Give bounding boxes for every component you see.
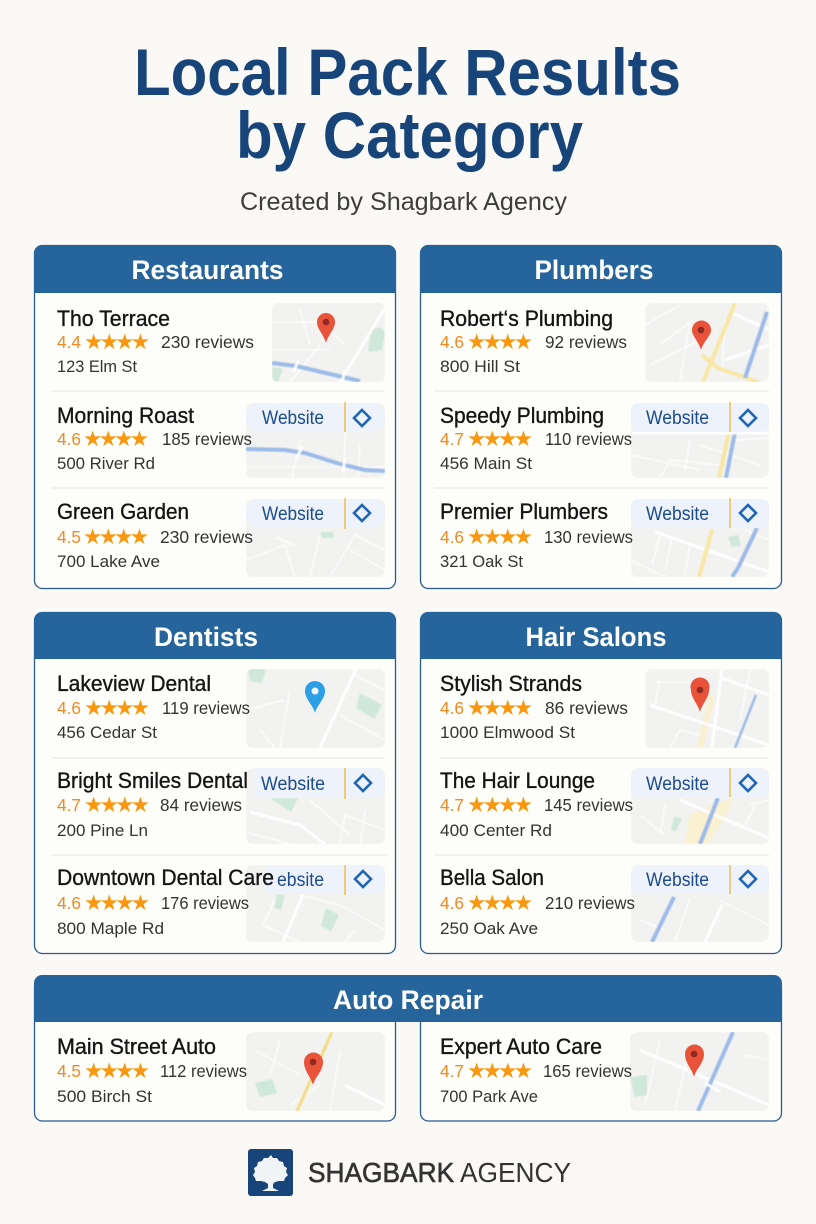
website button: Green Garden [246, 498, 385, 529]
listing: Stylish Strands: Stylish Strands [440, 671, 582, 696]
review count: The Hair Lounge: 145 reviews [544, 795, 633, 815]
map: Green Garden [246, 499, 385, 577]
icon: red map pin [690, 677, 709, 712]
panel: Auto Repair [34, 975, 782, 1121]
listing: Downtown Dental Care: Downtown Dental Care [57, 865, 274, 890]
listing: Lakeview Dental [57, 671, 250, 742]
heading: Dentists [34, 612, 396, 659]
listing: Morning Roast: Morning Roast [57, 403, 194, 428]
listing: Expert Auto Care: Expert Auto Care [440, 1034, 602, 1059]
listing: Morning Roast: 4.6 [57, 429, 81, 449]
map: Main Street Auto [246, 1032, 385, 1111]
listing: The Hair Lounge: ★★★★ [467, 793, 533, 818]
heading: Auto Repair [34, 975, 782, 1022]
heading: Plumbers [420, 245, 782, 293]
review count: Bella Salon: 210 reviews [545, 893, 635, 913]
listing: Main Street Auto: 4.5 [57, 1061, 81, 1081]
website button: Premier Plumbers: Website [646, 504, 709, 525]
listing: Speedy Plumbing: 4.7 [440, 429, 464, 449]
listing: Stylish Strands: 1000 Elmwood St [440, 723, 575, 742]
map: Robert's Plumbing [645, 303, 769, 382]
map: The Hair Lounge [631, 768, 769, 844]
website button: Morning Roast [246, 402, 385, 432]
listing: Green Garden: Green Garden [57, 499, 189, 524]
icon: red map pin [685, 1044, 704, 1077]
listing: Lakeview Dental: Lakeview Dental [57, 671, 211, 696]
listing: Expert Auto Care: 4.7 [440, 1061, 464, 1081]
icon: red map pin [304, 1052, 323, 1085]
listing: Robert's Plumbing: 800 Hill St [440, 357, 520, 376]
listing: Main Street Auto [57, 1034, 247, 1106]
listing: Bright Smiles Dental: ★★★★ [84, 793, 150, 818]
listing: Lakeview Dental: 456 Cedar St [57, 723, 157, 742]
listing: Green Garden [57, 499, 189, 550]
listing: Downtown Dental Care: 800 Maple Rd [57, 919, 164, 938]
panel: Hair Salons: 400 Center Rd [440, 821, 552, 840]
listing: Bella Salon: ★★★★ [467, 891, 533, 916]
listing: Robert's Plumbing: Robert‘s Plumbing [440, 306, 613, 331]
listing: The Hair Lounge: The Hair Lounge [440, 768, 595, 793]
review count: Green Garden: 230 reviews [160, 527, 253, 547]
listing: Premier Plumbers [440, 499, 608, 550]
listing: Premier Plumbers: Premier Plumbers [440, 499, 608, 524]
listing: Bright Smiles Dental [57, 768, 248, 840]
title: by Category [236, 98, 583, 172]
website button: Bright Smiles Dental [254, 768, 385, 799]
heading: Plumbers: Plumbers [534, 255, 654, 285]
listing: Tho Terrace: 4.4 [57, 332, 81, 352]
listing: Bright Smiles Dental: Bright Smiles Dental [57, 768, 248, 793]
listing: Green Garden: 4.5 [57, 527, 81, 547]
listing: Bright Smiles Dental: 200 Pine Ln [57, 821, 148, 840]
review count: Morning Roast: 185 reviews [162, 429, 252, 449]
map: Bright Smiles Dental [246, 768, 385, 844]
listing: Robert's Plumbing: 92 reviews [545, 332, 627, 352]
listing: Speedy Plumbing: Speedy Plumbing [440, 403, 604, 428]
listing: Bella Salon [440, 865, 544, 916]
website button: Premier Plumbers [631, 498, 769, 528]
icon: red map pin [317, 313, 335, 343]
listing: Robert's Plumbing [440, 306, 627, 376]
listing: Main Street Auto: 500 Birch St [57, 1087, 152, 1106]
panel: Restaurants: 700 Lake Ave [57, 552, 160, 571]
logo: Shagbark Agency [248, 1149, 571, 1196]
listing: Downtown Dental Care: ★★★★ [84, 891, 150, 916]
listing: Stylish Strands: 86 reviews [545, 698, 628, 718]
panel: Restaurants [34, 245, 396, 588]
website button: Bella Salon: Website [646, 870, 709, 891]
listing: Expert Auto Care [440, 1034, 632, 1106]
listing: Tho Terrace: 230 reviews [161, 332, 254, 352]
heading: Hair Salons [420, 612, 782, 659]
website button: Downtown Dental Care: ebsite [277, 870, 324, 891]
listing: Lakeview Dental: ★★★★ [84, 696, 150, 721]
website button: Bella Salon [631, 865, 769, 894]
listing: Downtown Dental Care [57, 865, 274, 938]
heading: Dentists: Dentists [154, 622, 258, 652]
listing: Premier Plumbers: 4.6 [440, 527, 464, 547]
review count: Premier Plumbers: 130 reviews [544, 527, 633, 547]
listing: Downtown Dental Care: 4.6 [57, 893, 81, 913]
map: Expert Auto Care [630, 1032, 769, 1111]
website button: Bright Smiles Dental: Website [261, 774, 325, 795]
subtitle: Created by Shagbark Agency [240, 188, 567, 216]
listing: Downtown Dental Care: 176 reviews [161, 893, 249, 913]
icon: tree badge [248, 1149, 293, 1196]
website button: The Hair Lounge [631, 768, 769, 798]
listing: Bella Salon: Bella Salon [440, 865, 544, 890]
map: Lakeview Dental [246, 669, 385, 748]
listing: Stylish Strands: ★★★★ [467, 696, 533, 721]
map: Tho Terrace [272, 303, 385, 382]
listing: Morning Roast: ★★★★ [83, 427, 149, 452]
map: Bella Salon [631, 865, 769, 942]
listing: Tho Terrace: ★★★★ [84, 330, 150, 355]
listing: Speedy Plumbing: ★★★★ [467, 427, 533, 452]
listing: The Hair Lounge [440, 768, 595, 818]
listing: Tho Terrace: 123 Elm St [57, 357, 137, 376]
listing: Morning Roast [57, 403, 194, 452]
wordmark: SHAGBARK AGENCY [308, 1157, 571, 1188]
listing: Robert's Plumbing: 4.6 [440, 332, 464, 352]
title: Local Pack Results [134, 35, 681, 109]
listing: Lakeview Dental: 4.6 [57, 698, 81, 718]
listing: Bella Salon: 4.6 [440, 893, 464, 913]
listing: Expert Auto Care: 165 reviews [543, 1061, 632, 1081]
listing: Main Street Auto: Main Street Auto [57, 1034, 216, 1059]
listing: Speedy Plumbing [440, 403, 604, 452]
map: Stylish Strands [645, 669, 769, 748]
map: Morning Roast [246, 403, 385, 478]
panel: Dentists [34, 612, 396, 954]
listing: Tho Terrace [57, 306, 254, 376]
website button: The Hair Lounge: Website [646, 774, 709, 795]
listing: Bright Smiles Dental: 4.7 [57, 795, 81, 815]
panel: Hair Salons: 250 Oak Ave [440, 919, 538, 938]
website button: Green Garden: Website [262, 504, 324, 525]
heading: Restaurants [34, 245, 396, 293]
panel: Plumbers: 456 Main St [440, 454, 532, 473]
listing: Stylish Strands [440, 671, 628, 742]
heading: Auto Repair: Auto Repair [333, 985, 483, 1015]
panel: Restaurants: 500 River Rd [57, 454, 155, 473]
panel: Plumbers: 321 Oak St [440, 552, 523, 571]
listing: Expert Auto Care: ★★★★ [467, 1059, 533, 1084]
icon: red map pin [692, 320, 711, 350]
heading: Hair Salons: Hair Salons [526, 622, 666, 652]
review count: Speedy Plumbing: 110 reviews [545, 429, 632, 449]
listing: Bright Smiles Dental: 84 reviews [160, 795, 242, 815]
website button: Downtown Dental Care [265, 865, 385, 895]
website button: Speedy Plumbing: Website [646, 408, 709, 429]
panel: Hair Salons [420, 612, 782, 954]
website button: Morning Roast: Website [262, 408, 324, 429]
listing: Green Garden: ★★★★ [83, 525, 149, 550]
listing: Main Street Auto: 112 reviews [160, 1061, 247, 1081]
listing: Expert Auto Care: 700 Park Ave [440, 1087, 538, 1106]
listing: Robert's Plumbing: ★★★★ [467, 330, 533, 355]
listing: Main Street Auto: ★★★★ [84, 1059, 150, 1084]
listing: Tho Terrace: Tho Terrace [57, 306, 170, 331]
listing: The Hair Lounge: 4.7 [440, 795, 464, 815]
title [134, 35, 681, 172]
map: Premier Plumbers [631, 499, 769, 577]
icon: blue map pin [305, 681, 325, 713]
panel: Plumbers [420, 245, 782, 588]
map: Downtown Dental Care [246, 865, 385, 942]
heading: Restaurants: Restaurants [132, 255, 284, 285]
listing: Premier Plumbers: ★★★★ [467, 525, 533, 550]
website button: Speedy Plumbing [631, 402, 769, 432]
listing: Lakeview Dental: 119 reviews [162, 698, 250, 718]
map: Speedy Plumbing [631, 403, 769, 478]
listing: Stylish Strands: 4.6 [440, 698, 464, 718]
